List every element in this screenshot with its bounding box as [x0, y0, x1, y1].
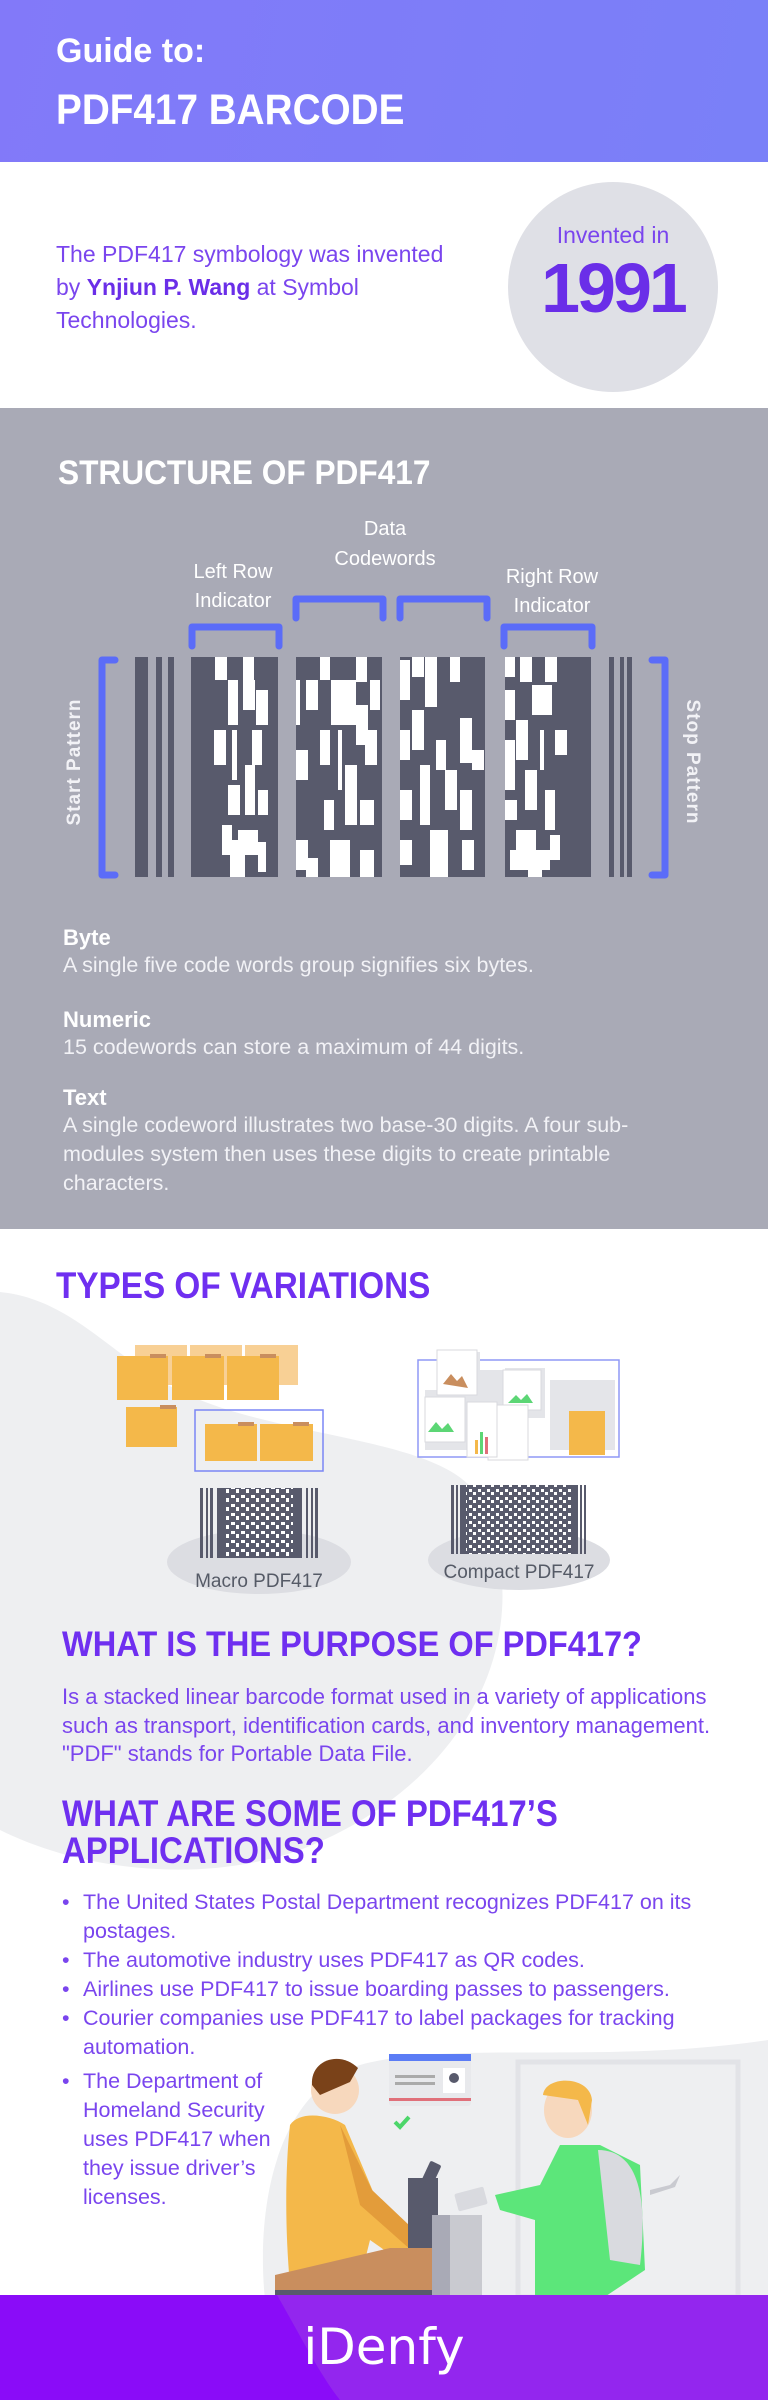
illustration: compact PDF417 [417, 1350, 620, 1590]
applications list: • [62, 2069, 70, 2093]
heading: applications [62, 1793, 558, 1871]
illustration: compact PDF417: Compact PDF417 [443, 1562, 595, 1583]
applications list [62, 1890, 691, 2209]
byte: A single five code words group signifies six bytes. [63, 953, 534, 977]
chart: PDF417 structure diagram [64, 518, 703, 878]
numeric: Numeric [63, 1007, 151, 1032]
labels: Indicator [195, 590, 272, 612]
panel: structure [0, 408, 768, 1229]
background blob [0, 1292, 768, 2295]
applications list: uses PDF417 when [83, 2127, 271, 2151]
title: PDF417 BARCODE [56, 86, 404, 134]
applications list: Homeland Security [83, 2098, 265, 2122]
header: guide to: Guide to: [56, 32, 205, 70]
footer [0, 2295, 768, 2400]
numeric [63, 1007, 524, 1059]
applications list: postages. [83, 1919, 176, 1943]
heading: applications: WHAT ARE SOME OF PDF417’S [62, 1793, 558, 1834]
labels: Codewords [334, 548, 436, 570]
invented label: Invented in [557, 222, 669, 248]
purpose text: such as transport, identification cards, and inventory management. [62, 1712, 710, 1738]
purpose text [62, 1684, 710, 1766]
labels: Indicator [514, 595, 591, 617]
labels: Data [364, 518, 407, 540]
side labels: Start Pattern [64, 698, 85, 826]
purpose text: Is a stacked linear barcode format used in a variety of applications [62, 1684, 706, 1709]
applications list: • [62, 1890, 70, 1914]
intro text [56, 241, 443, 333]
illustration: macro PDF417 [117, 1345, 351, 1594]
text: A single codeword illustrates two base-30 digits. A four sub- [63, 1113, 628, 1137]
text: Text [63, 1085, 107, 1110]
heading: types of variations: TYPES OF VARIATIONS [56, 1265, 430, 1306]
applications list: The United States Postal Department recognizes PDF417 on its [83, 1890, 691, 1914]
applications list: automation. [83, 2035, 195, 2059]
intro text: by Ynjiun P. Wang at Symbol [56, 274, 359, 300]
illustration: airport check [275, 2054, 740, 2295]
applications list: • [62, 1948, 70, 1972]
applications list: they issue driver’s [83, 2156, 255, 2180]
intro text: The PDF417 symbology was invented [56, 241, 443, 267]
applications list: • [62, 1977, 70, 2001]
labels: Left Row [194, 561, 273, 583]
circle: invented in 1991 [508, 182, 718, 392]
id card [389, 2054, 471, 2106]
illustration: macro PDF417: Macro PDF417 [195, 1571, 323, 1592]
labels [194, 518, 599, 617]
year: 1991 [541, 249, 685, 327]
applications list: The automotive industry uses PDF417 as QR codes. [83, 1948, 585, 1972]
text: characters. [63, 1171, 169, 1195]
text [63, 1085, 628, 1195]
text: modules system then uses these digits to create printable [63, 1142, 610, 1166]
intro text: Technologies. [56, 307, 197, 333]
header band [0, 0, 768, 162]
purpose text: "PDF" stands for Portable Data File. [62, 1741, 413, 1766]
applications list: • [62, 2006, 70, 2030]
applications list: Airlines use PDF417 to issue boarding passes to passengers. [83, 1977, 670, 2001]
brackets [102, 599, 665, 875]
byte: Byte [63, 925, 111, 950]
labels: Right Row [506, 566, 599, 588]
byte [63, 925, 534, 977]
clerk [286, 2116, 420, 2285]
applications list: Courier companies use PDF417 to label packages for tracking [83, 2006, 675, 2030]
heading: structure: STRUCTURE OF PDF417 [58, 454, 430, 492]
traveller [495, 2145, 645, 2300]
applications list: licenses. [83, 2185, 167, 2209]
applications list: The Department of [83, 2069, 262, 2093]
chart: PDF417 structure diagram: Stop Pattern [682, 700, 703, 824]
numeric: 15 codewords can store a maximum of 44 digits. [63, 1035, 524, 1059]
heading: applications: APPLICATIONS? [62, 1830, 325, 1871]
counter [408, 2178, 438, 2258]
logo: iDenfy: iDenfy [303, 2318, 465, 2376]
heading: purpose: WHAT IS THE PURPOSE OF PDF417? [62, 1625, 642, 1664]
start/stop patterns [135, 657, 632, 877]
